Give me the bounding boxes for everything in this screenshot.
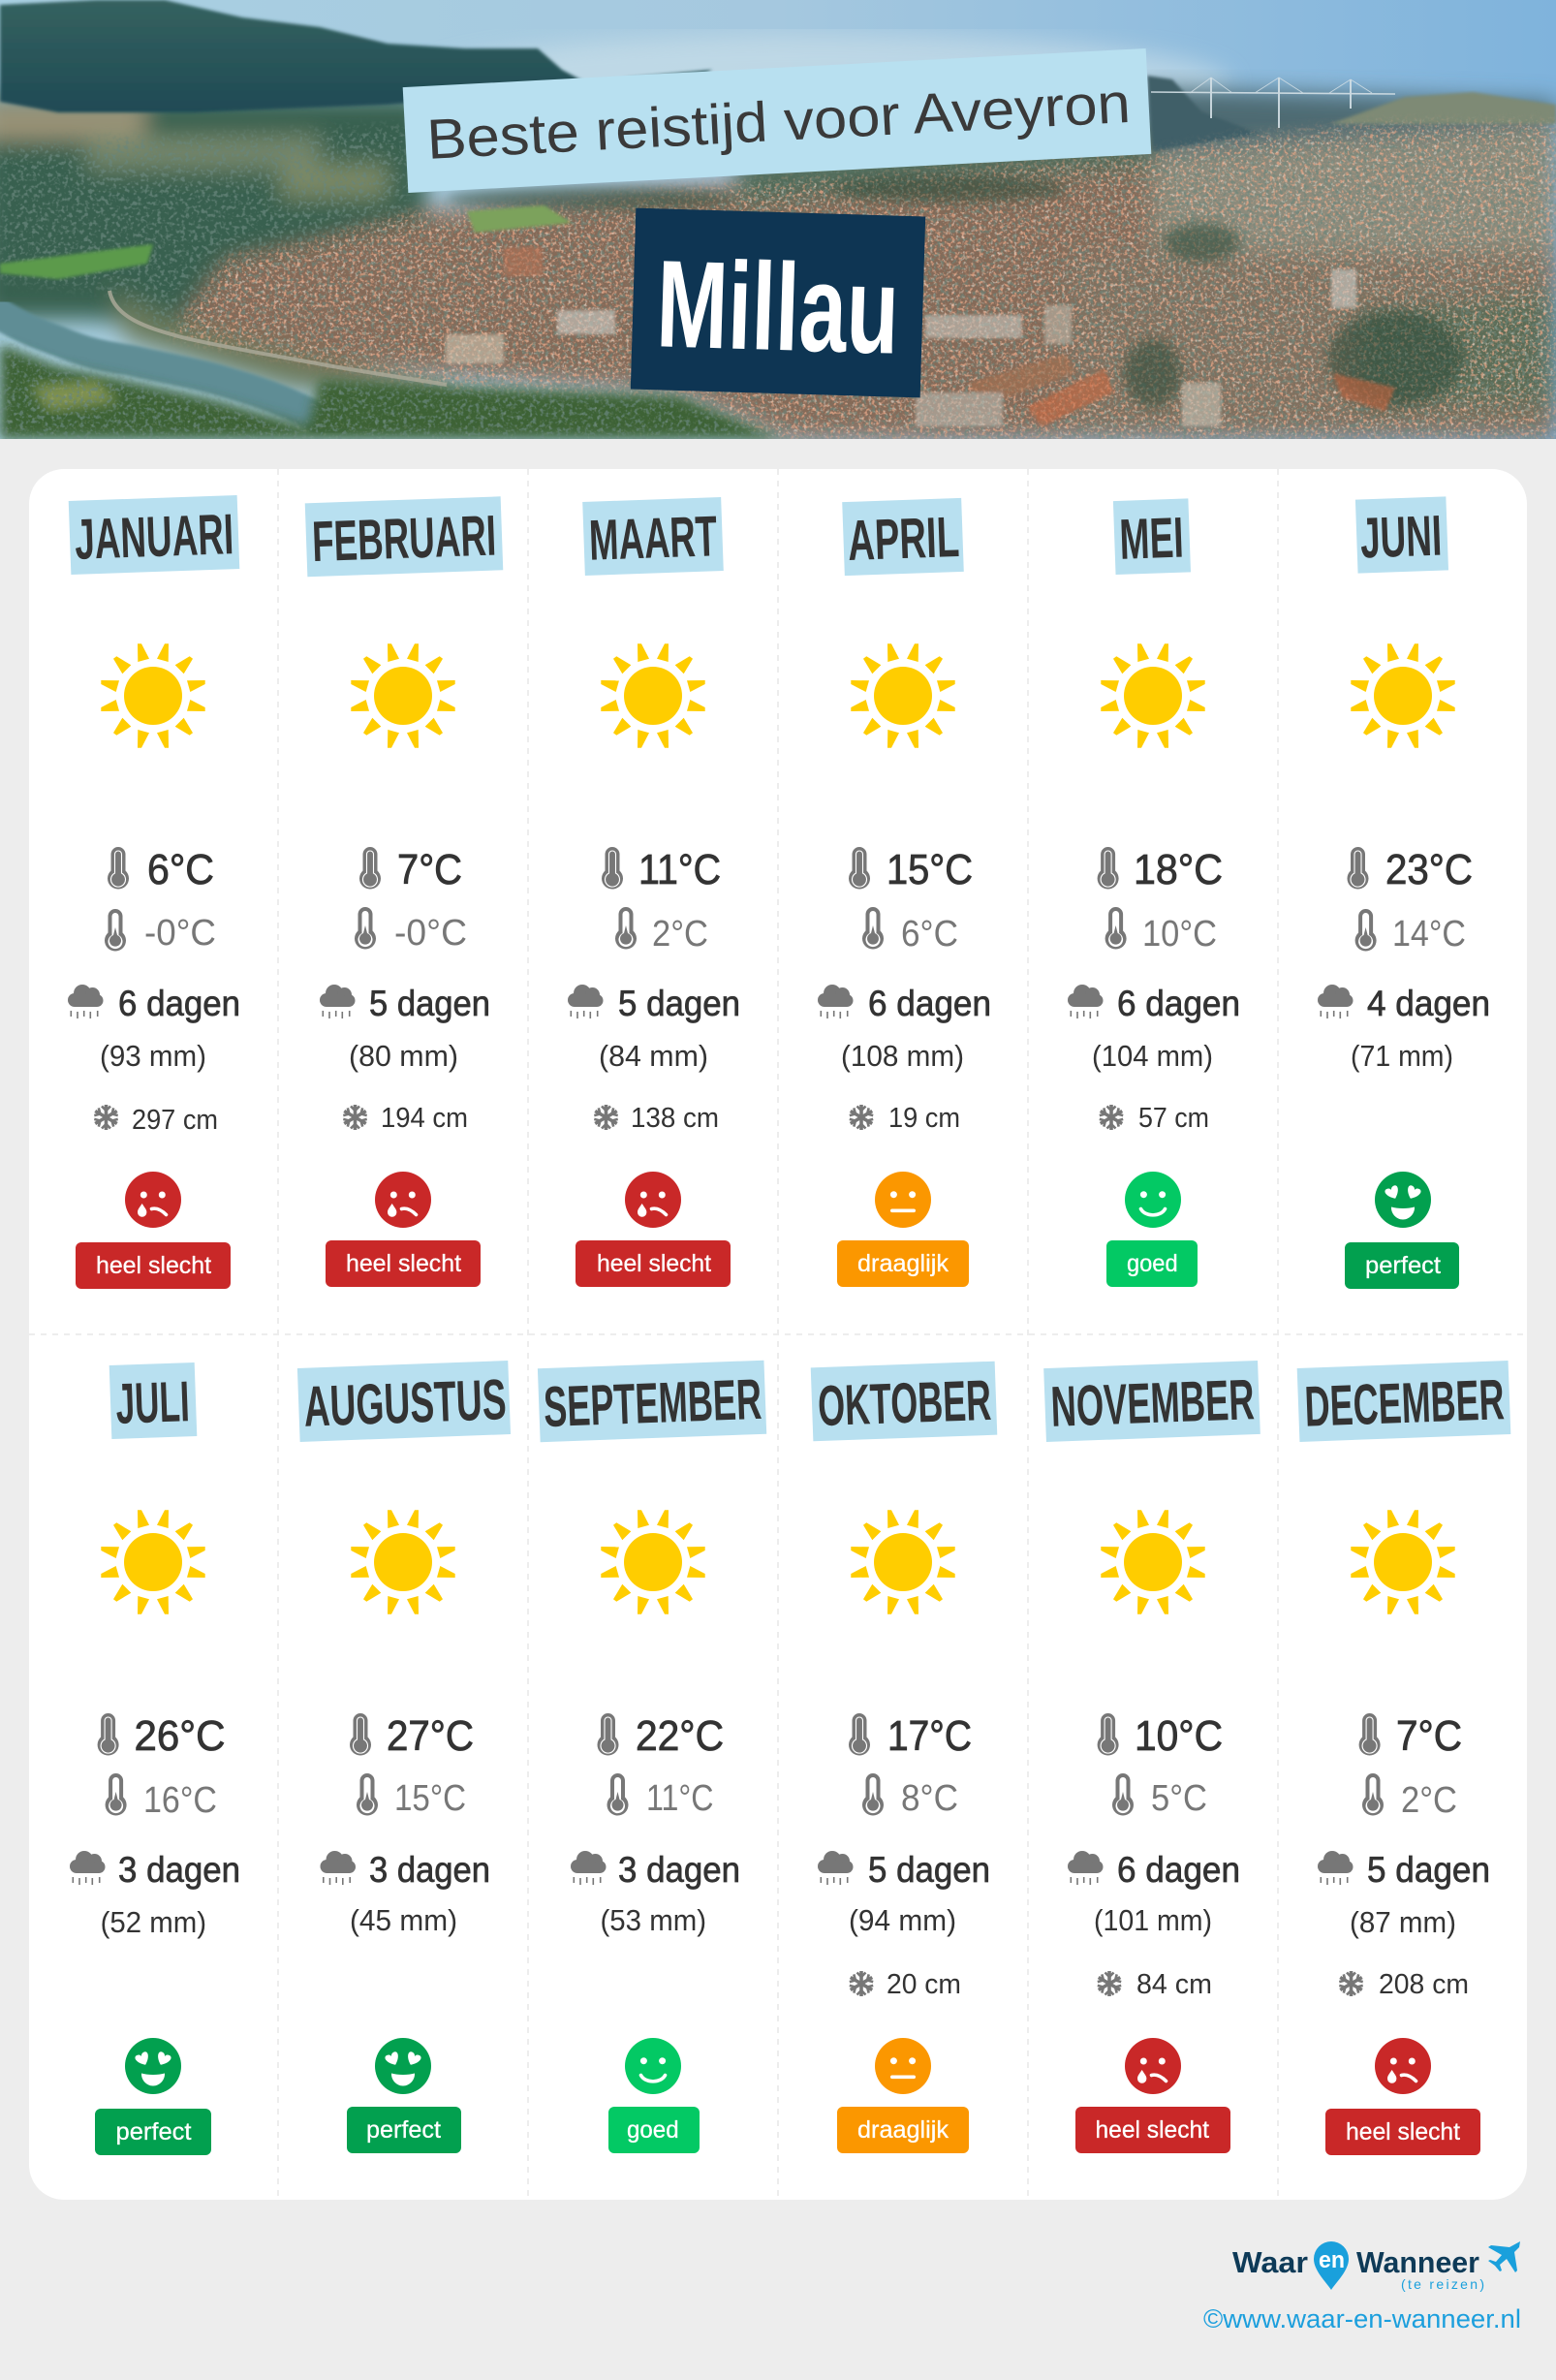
rainfall: (71 mm) xyxy=(1351,1039,1453,1073)
heading: juni xyxy=(1355,496,1448,574)
rating badge: heel slecht xyxy=(1095,2116,1209,2144)
max temperature xyxy=(602,846,721,893)
icon: airplane xyxy=(1488,2241,1520,2272)
max temperature xyxy=(359,846,462,893)
icon: sun xyxy=(601,1510,705,1614)
rating badge xyxy=(1345,1242,1459,1289)
heading: juni: JUNI xyxy=(1359,504,1443,570)
rating badge: goed xyxy=(1127,1250,1178,1277)
rating badge: perfect xyxy=(116,2118,192,2145)
rain days xyxy=(818,1850,990,1890)
icon: sun xyxy=(1101,643,1205,748)
month: juli xyxy=(70,1362,240,2155)
snowfall: 297 cm xyxy=(132,1105,218,1136)
min temperature xyxy=(1355,909,1466,955)
max temperature xyxy=(108,846,214,893)
max temperature xyxy=(98,1712,225,1760)
rating badge xyxy=(95,2109,211,2155)
large buildings xyxy=(446,247,1395,426)
rainfall: (52 mm) xyxy=(101,1905,206,1939)
min temperature xyxy=(607,1773,713,1819)
min temperature xyxy=(355,907,467,954)
min temperature xyxy=(1105,907,1217,955)
snowfall xyxy=(1096,1969,1212,2000)
snowfall xyxy=(848,1969,961,2000)
heading: februari: FEBRUARI xyxy=(311,504,497,574)
icon: sun xyxy=(1351,1510,1455,1614)
heading: augustus xyxy=(297,1361,511,1442)
month: april xyxy=(818,498,991,1287)
icon: sun xyxy=(1101,1510,1205,1614)
rating badge xyxy=(576,1240,731,1287)
icon: sun xyxy=(101,643,205,748)
icon: smiley xyxy=(625,2038,681,2094)
lower trees xyxy=(0,344,785,439)
heading: juli: JULI xyxy=(114,1369,191,1436)
heading: juli xyxy=(109,1362,197,1439)
snowfall xyxy=(848,1103,960,1134)
icon: sun xyxy=(351,643,455,748)
dark tree patches in town xyxy=(446,175,1463,407)
icon: smiley xyxy=(375,2038,431,2094)
rain days: 6 dagen xyxy=(118,984,240,1023)
bridge xyxy=(1151,78,1395,128)
icon: smiley xyxy=(875,1172,931,1228)
icon: map pin: en xyxy=(1319,2247,1345,2273)
river xyxy=(0,308,334,426)
town texture xyxy=(169,116,1556,439)
rating badge xyxy=(608,2107,700,2153)
min temperature xyxy=(106,1773,217,1821)
icon: map pin xyxy=(1314,2241,1349,2290)
rating badge: heel slecht xyxy=(1346,2118,1460,2145)
panel: monthly climate card xyxy=(29,469,1527,2200)
city name banner xyxy=(631,208,925,397)
rain days xyxy=(1068,1850,1240,1890)
rainfall: (80 mm) xyxy=(349,1039,458,1073)
heading: mei xyxy=(1113,498,1191,575)
rating badge xyxy=(76,1242,231,1289)
month: oktober xyxy=(811,1362,997,2153)
rainfall: (108 mm) xyxy=(841,1039,964,1073)
icon: sun xyxy=(851,643,955,748)
rain days: 6 dagen xyxy=(1117,984,1240,1023)
rain days: 6 dagen xyxy=(868,984,991,1023)
max temperature xyxy=(350,1712,474,1760)
header photo: aerial view of Millau xyxy=(0,0,1556,439)
footer logo: Waar en Wanneer xyxy=(1232,2241,1520,2292)
min temperature: 2°C xyxy=(1401,1780,1457,1821)
rain days xyxy=(1068,984,1240,1023)
max temperature: 23°C xyxy=(1385,846,1473,893)
icon: smiley xyxy=(1375,2038,1431,2094)
rainfall: (93 mm) xyxy=(100,1039,206,1073)
month: augustus xyxy=(297,1361,511,2153)
min temperature: -0°C xyxy=(394,913,467,954)
icon: sun xyxy=(351,1510,455,1614)
snowfall: 19 cm xyxy=(888,1103,960,1134)
month: december xyxy=(1297,1361,1510,2155)
footer logo: Waar en Wanneer: (te reizen) xyxy=(1401,2276,1484,2292)
rating badge xyxy=(347,2107,461,2153)
month: mei xyxy=(1068,498,1240,1287)
max temperature xyxy=(1098,846,1223,893)
icon: sun xyxy=(851,1510,955,1614)
rating badge xyxy=(326,1240,481,1287)
snowfall: 84 cm xyxy=(1136,1969,1212,2000)
icon: smiley xyxy=(125,2038,181,2094)
heading: november xyxy=(1043,1361,1260,1442)
rain days: 5 dagen xyxy=(369,984,490,1023)
rain days xyxy=(568,984,740,1023)
min temperature: 6°C xyxy=(901,914,958,955)
rain days: 4 dagen xyxy=(1367,984,1490,1023)
month: januari xyxy=(68,495,240,1289)
icon: smiley xyxy=(125,1172,181,1228)
max temperature: 11°C xyxy=(638,846,721,893)
min temperature: -0°C xyxy=(144,913,216,954)
title banner: Beste reistijd voor Aveyron xyxy=(425,72,1132,172)
rainfall: (87 mm) xyxy=(1350,1905,1456,1939)
min temperature xyxy=(105,909,216,954)
min temperature: 11°C xyxy=(646,1778,713,1819)
rating badge xyxy=(837,2107,969,2153)
heading: oktober: OKTOBER xyxy=(817,1368,992,1438)
rain days: 5 dagen xyxy=(618,984,740,1023)
icon: smiley xyxy=(375,1172,431,1228)
max temperature xyxy=(849,1712,972,1760)
max temperature: 27°C xyxy=(387,1712,474,1760)
snowfall: 20 cm xyxy=(887,1969,961,2000)
snowfall: 57 cm xyxy=(1138,1103,1209,1134)
heading: maart: MAART xyxy=(588,504,718,573)
rating badge xyxy=(1106,1240,1198,1287)
rating badge: goed xyxy=(627,2116,679,2144)
rain days xyxy=(320,1850,490,1890)
max temperature: 10°C xyxy=(1135,1712,1223,1760)
snowfall xyxy=(93,1105,218,1136)
icon: smiley xyxy=(625,1172,681,1228)
rain days xyxy=(818,984,991,1023)
min temperature xyxy=(862,1773,958,1819)
rain days xyxy=(320,984,490,1023)
snowfall: 138 cm xyxy=(631,1103,719,1134)
rating badge: draaglijk xyxy=(857,2116,949,2144)
road xyxy=(109,291,447,385)
icon: smiley xyxy=(1375,1172,1431,1228)
min temperature: 2°C xyxy=(652,914,708,955)
rating badge xyxy=(1325,2109,1480,2155)
heading: april xyxy=(842,498,964,576)
min temperature xyxy=(862,907,958,955)
footer website link: ©www.waar-en-wanneer.nl xyxy=(1203,2304,1521,2333)
forest texture xyxy=(0,123,760,439)
rain days: 5 dagen xyxy=(868,1850,990,1890)
min temperature: 10°C xyxy=(1142,914,1217,955)
max temperature: 7°C xyxy=(397,846,462,893)
min temperature: 16°C xyxy=(143,1780,217,1821)
rain days xyxy=(1318,984,1490,1023)
max temperature: 15°C xyxy=(887,846,973,893)
heading: maart xyxy=(582,497,724,576)
icon: smiley xyxy=(1125,2038,1181,2094)
min temperature xyxy=(357,1773,466,1819)
heading: november: NOVEMBER xyxy=(1049,1367,1256,1439)
max temperature xyxy=(1359,1712,1462,1760)
rating badge: perfect xyxy=(1365,1252,1441,1279)
max temperature: 17°C xyxy=(887,1712,972,1760)
rain days xyxy=(571,1850,740,1890)
snowfall xyxy=(1098,1103,1209,1134)
rainfall: (84 mm) xyxy=(599,1039,708,1073)
icon: smiley xyxy=(875,2038,931,2094)
heading: januari xyxy=(69,495,239,575)
max temperature: 7°C xyxy=(1396,1712,1462,1760)
heading: februari xyxy=(305,496,503,577)
city name banner: Millau xyxy=(655,235,901,381)
month: juni xyxy=(1318,496,1490,1289)
max temperature xyxy=(1347,846,1473,893)
rainfall: (104 mm) xyxy=(1092,1039,1213,1073)
rain days: 3 dagen xyxy=(618,1850,740,1890)
max temperature: 18°C xyxy=(1134,846,1223,893)
rainfall: (45 mm) xyxy=(350,1903,457,1937)
rain days: 3 dagen xyxy=(118,1850,240,1890)
title banner xyxy=(403,48,1151,193)
max temperature: 26°C xyxy=(134,1712,225,1760)
icon: smiley xyxy=(1125,1172,1181,1228)
rainfall: (94 mm) xyxy=(849,1903,956,1937)
heading: september: SEPTEMBER xyxy=(543,1367,762,1439)
month: november xyxy=(1043,1361,1260,2153)
lower tree highlights xyxy=(2,352,754,438)
min temperature xyxy=(1112,1773,1207,1819)
rating badge: draaglijk xyxy=(857,1250,949,1277)
snowfall xyxy=(1338,1969,1469,2000)
snowfall: 208 cm xyxy=(1379,1969,1469,2000)
rain days xyxy=(1318,1850,1490,1890)
heading: augustus: AUGUSTUS xyxy=(302,1367,508,1439)
max temperature xyxy=(1098,1712,1223,1760)
min temperature: 5°C xyxy=(1151,1778,1207,1819)
min temperature: 8°C xyxy=(901,1778,958,1819)
max temperature xyxy=(849,846,973,893)
rating badge: perfect xyxy=(366,2116,441,2144)
min temperature: 15°C xyxy=(394,1778,466,1819)
snowfall: 194 cm xyxy=(381,1103,468,1134)
left hill xyxy=(0,0,712,112)
snowfall xyxy=(593,1103,719,1134)
footer logo: Waar en Wanneer: Waar xyxy=(1232,2245,1308,2279)
min temperature xyxy=(1362,1773,1457,1821)
max temperature: 6°C xyxy=(147,846,214,893)
heading: mei: MEI xyxy=(1118,506,1185,572)
icon: sun xyxy=(101,1510,205,1614)
rain days xyxy=(68,984,240,1023)
max temperature xyxy=(597,1712,724,1760)
icon: sun xyxy=(601,643,705,748)
rating badge: heel slecht xyxy=(346,1250,461,1277)
min temperature xyxy=(615,907,708,955)
min temperature: 14°C xyxy=(1392,914,1466,955)
rainfall: (53 mm) xyxy=(601,1903,706,1937)
rain days: 6 dagen xyxy=(1117,1850,1240,1890)
max temperature: 22°C xyxy=(636,1712,724,1760)
rating badge: heel slecht xyxy=(597,1250,711,1277)
rain days xyxy=(70,1850,240,1890)
month: februari xyxy=(305,496,503,1287)
heading: januari: JANUARI xyxy=(74,502,234,572)
heading: oktober xyxy=(811,1362,997,1441)
fields xyxy=(0,244,153,279)
rain days: 5 dagen xyxy=(1367,1850,1490,1890)
snowfall xyxy=(342,1103,468,1134)
footer logo: Waar en Wanneer: Wanneer xyxy=(1356,2245,1479,2279)
month: maart xyxy=(568,497,740,1287)
rain days: 3 dagen xyxy=(369,1850,490,1890)
rating badge xyxy=(837,1240,969,1287)
month: september xyxy=(538,1361,766,2153)
rating badge: heel slecht xyxy=(96,1252,211,1279)
icon: sun xyxy=(1351,643,1455,748)
heading: september xyxy=(538,1361,766,1442)
rating badge xyxy=(1075,2107,1230,2153)
rainfall: (101 mm) xyxy=(1094,1903,1212,1937)
heading: april: APRIL xyxy=(847,505,960,573)
